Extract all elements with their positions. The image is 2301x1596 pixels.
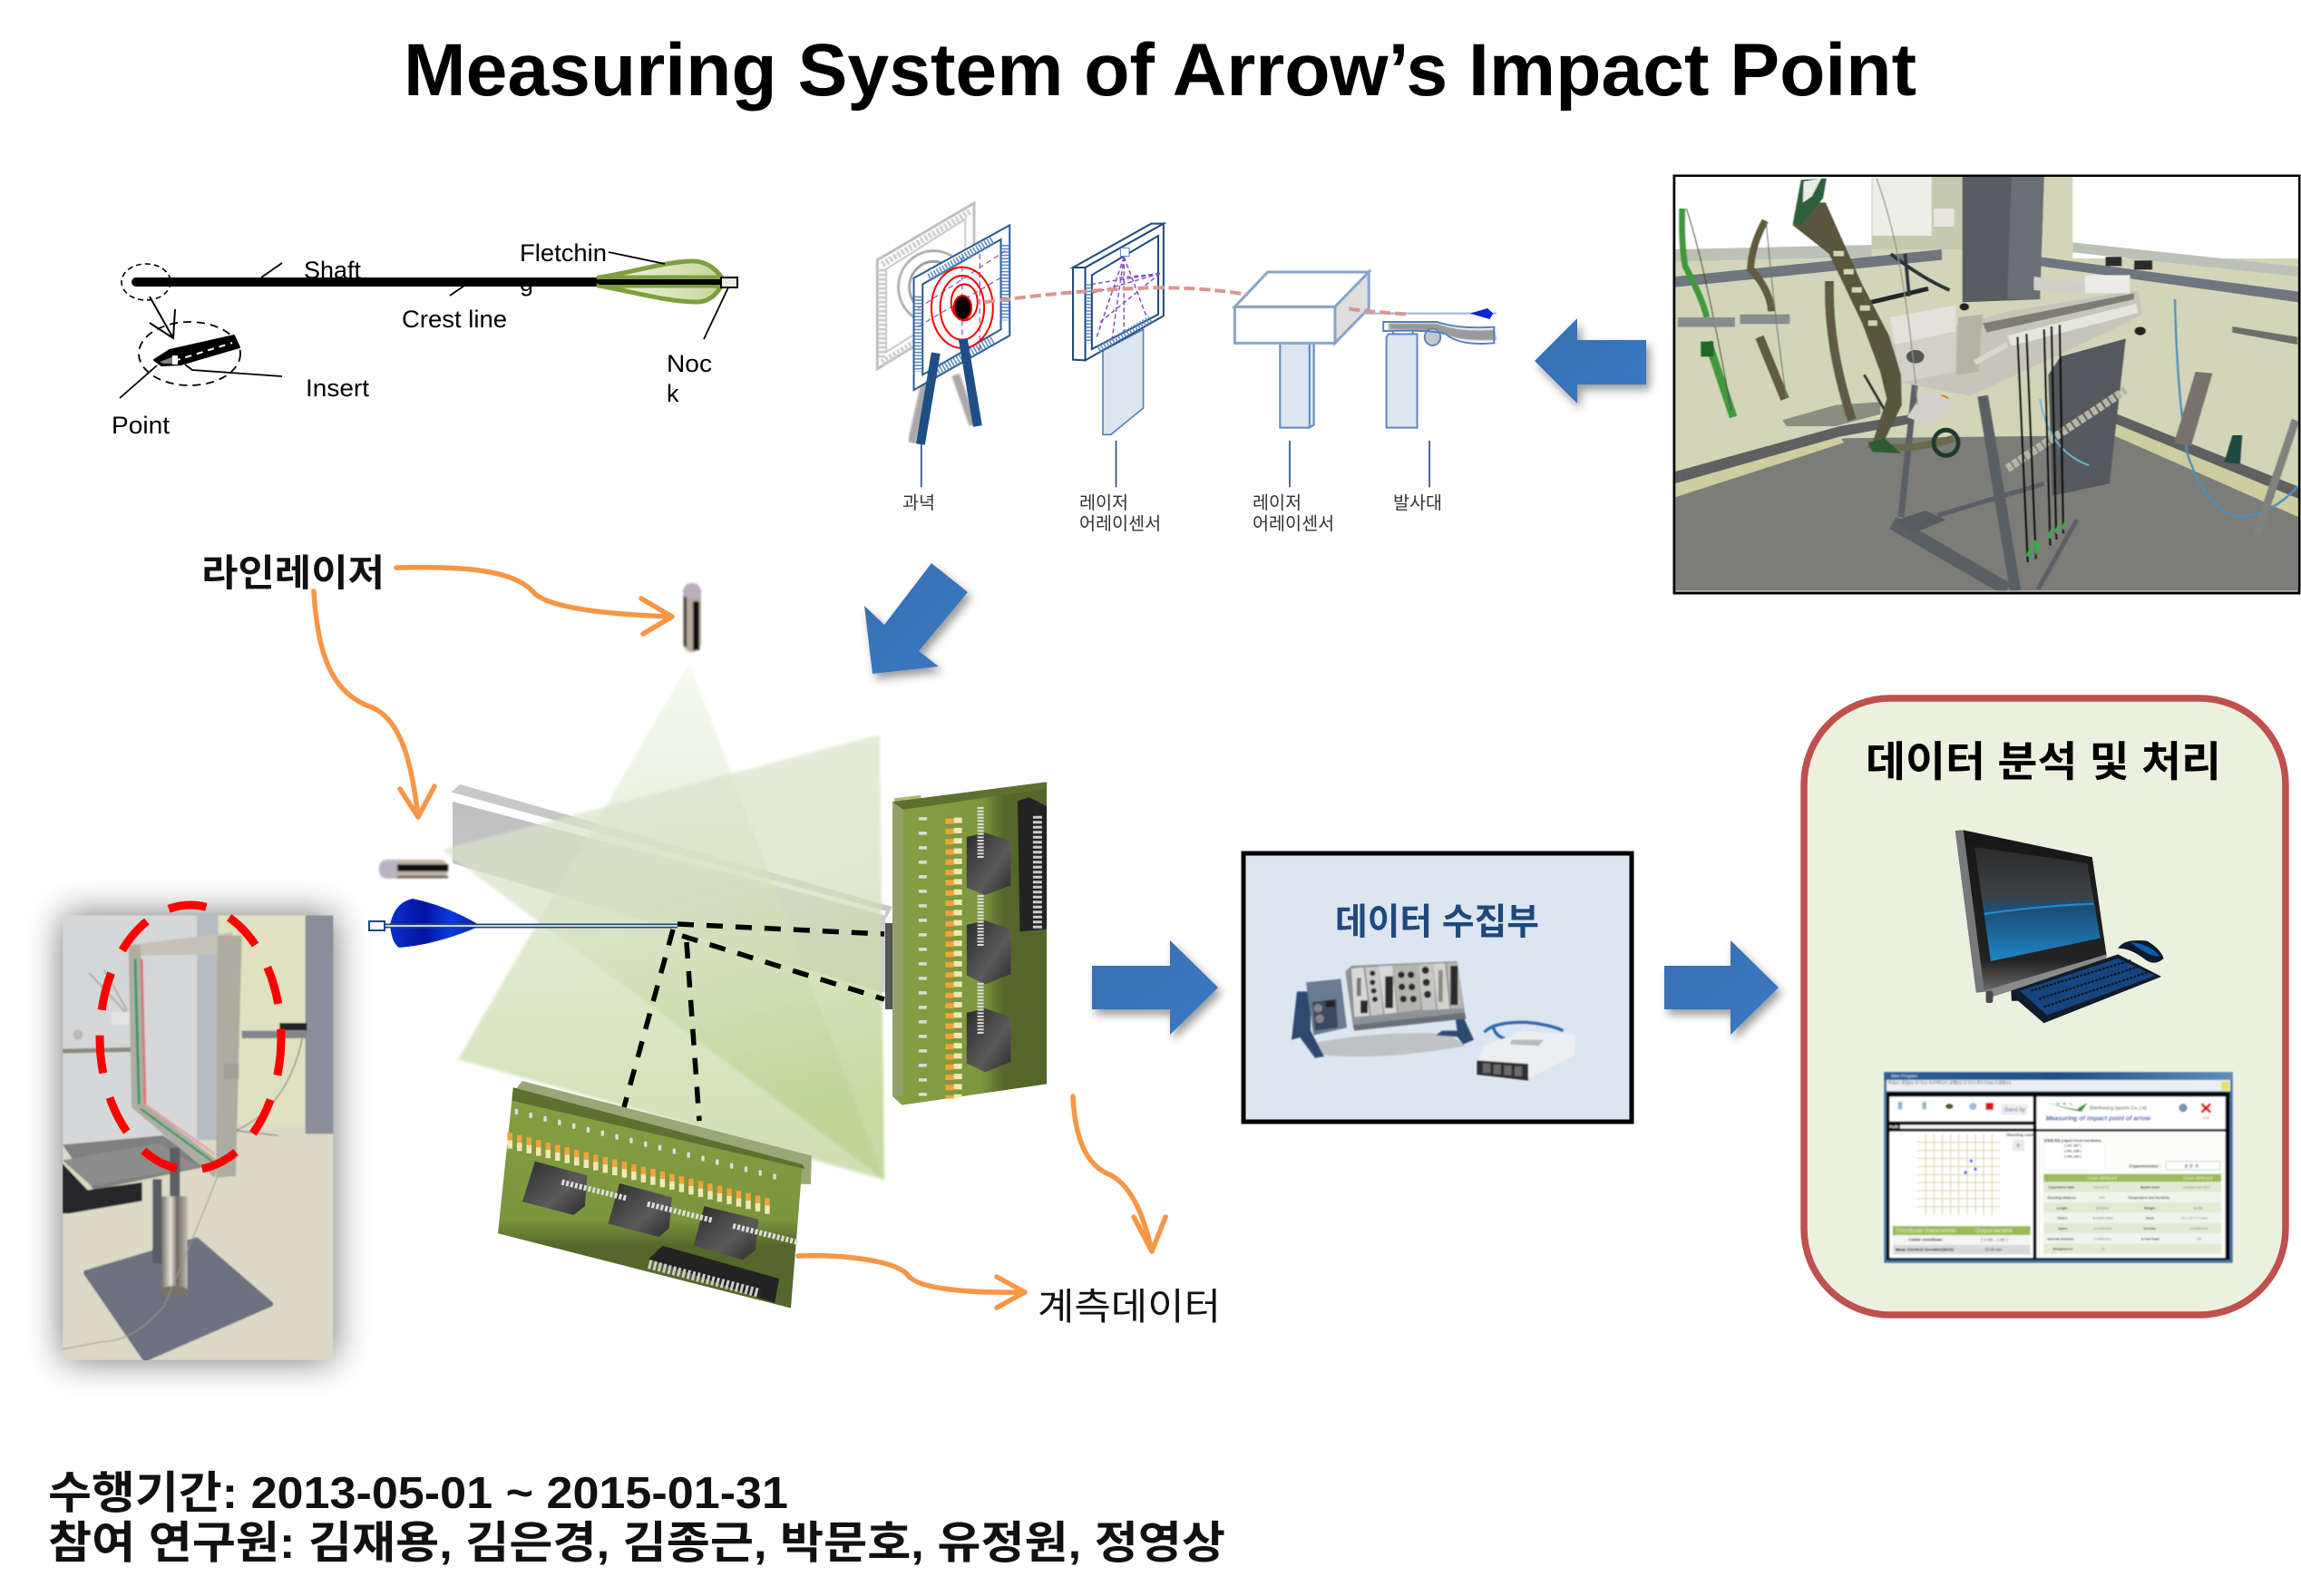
magnified point and insert: [154, 336, 239, 365]
label: laser array sensor 2: 레이저: [1253, 493, 1302, 513]
software screenshot: Shooting distance: [2047, 1196, 2076, 1200]
software screenshot: Experimentor :: [2130, 1163, 2161, 1169]
main rail: [1893, 290, 2142, 396]
software screenshot: HAKIMA RED 293.1: [2183, 1186, 2210, 1190]
software screenshot: Mean Absolute Deviation(MAD): [1896, 1248, 1955, 1252]
arrow anatomy diagram: [112, 239, 737, 439]
software screenshot: 15.45 mm: [1984, 1248, 2003, 1252]
software screenshot: Fletch: [2058, 1217, 2067, 1221]
software screenshot: 0.2450inches: [2093, 1237, 2111, 1241]
label: Insert: Insert: [306, 375, 370, 402]
label: Shaft: Shaft: [304, 257, 361, 284]
software screenshot: Arrow head: [2141, 1237, 2160, 1241]
software screenshot: 20: [2101, 1248, 2105, 1251]
hanging arrows: [2017, 325, 2063, 562]
software screenshot: ( 2.69 , 1.80 ): [1981, 1238, 2008, 1243]
panel: data analysis and processing: [1804, 698, 2286, 1315]
magnified tip dashed ellipse: [139, 322, 240, 385]
software screenshot: [1884, 1072, 2233, 1263]
LED bands: [918, 240, 1005, 376]
software screenshot: Main Program: [1891, 1074, 1917, 1078]
magnifier arrow: [150, 297, 175, 338]
machine frame legs: [1893, 381, 2077, 591]
panel heading: 데이터 수집부: [1335, 902, 1539, 942]
target rings: [931, 268, 993, 348]
software screenshot: Shooting count: [2006, 1133, 2035, 1137]
label: Fletching: [520, 239, 607, 297]
software screenshot: Internal diameter: [2047, 1237, 2074, 1241]
software screenshot: Weight: [2144, 1206, 2156, 1210]
result table: [1893, 1226, 2031, 1235]
software screenshot: Measuring of impact point of arrow: [2046, 1114, 2152, 1123]
ghost target panel: [877, 203, 974, 369]
lower sensor board: [498, 1081, 812, 1309]
photo scene: [1675, 177, 2298, 591]
fletching: [599, 261, 722, 302]
software screenshot: Path:: [1889, 1124, 1900, 1129]
software screenshot: 40M: [2099, 1196, 2105, 1200]
label: laser array sensor 2: [1253, 493, 1334, 534]
launcher: [1383, 322, 1497, 428]
small arrow on launcher: [1362, 308, 1497, 319]
orange arrow: lower board to measured data: [798, 1256, 1025, 1308]
bows on wall: [1678, 209, 1950, 420]
label: launcher: 발사대: [1393, 493, 1442, 513]
project period: 수행기간: 2013-05-01 ~ 2015-01-31: [48, 1469, 788, 1518]
software screenshot: Nock: [2146, 1217, 2155, 1221]
laser array 1 frame: [1073, 224, 1164, 360]
software screenshot: 송 문 게: [2184, 1163, 2199, 1169]
top line laser emitter: [683, 583, 701, 652]
software screenshot: Model name: [2140, 1186, 2160, 1190]
green laser sheet: top emitter: [458, 663, 884, 1180]
software screenshot: ( 146, 134 ): [2064, 1155, 2082, 1159]
specification table: [2043, 1174, 2221, 1182]
label: Nock: Noc: [667, 350, 712, 377]
label: laser array sensor 1: [1079, 493, 1161, 534]
label: laser array sensor 1: 레이저: [1079, 493, 1128, 513]
laser array 1 post: [1103, 329, 1144, 434]
panel box: [1804, 698, 2286, 1315]
software screenshot: SKL: [2056, 1102, 2076, 1107]
gray leg shadows: [912, 375, 973, 443]
orange arrow: side board to measured data: [1073, 1096, 1165, 1251]
software screenshot: Coordinate characteristic: [1896, 1229, 1956, 1234]
title: Measuring System of Arrow’s Impact Point: [404, 29, 1916, 112]
orange arrow: line laser to side emitter: [314, 591, 434, 817]
callout leaders: [921, 441, 1429, 487]
test setup schematic: [877, 203, 1497, 534]
software screenshot: Overlap: [2143, 1227, 2157, 1231]
label: Point: Point: [112, 412, 171, 439]
shaft tip dashed circle: [122, 264, 171, 300]
target frame: [914, 225, 1009, 390]
software screenshot: Output variable: [1975, 1229, 2013, 1234]
logo and product heading: [2046, 1103, 2088, 1112]
blue arrow: photo to schematic: [1535, 318, 1646, 404]
panel box: [1243, 853, 1632, 1122]
software screenshot: ( 141, 037 ): [2064, 1143, 2082, 1147]
software screenshot: 파일(F) 편집(E) 보기(V) 프로젝트(P) 실행(O) 도구(T) 윈도우(W) 도움말(H): [1888, 1080, 2012, 1086]
side line laser emitter: [379, 860, 448, 879]
software screenshot: YELLOW TCX Nock: [2180, 1217, 2208, 1221]
toolbar icons: [1898, 1102, 2027, 1114]
software screenshot: Length: [2056, 1206, 2068, 1210]
label: Fletching: g: [520, 269, 533, 297]
software screenshot: 2013.02.21: [2094, 1186, 2109, 1190]
gray beam rail: [451, 784, 892, 993]
label: laser array sensor 2: 어레이센서: [1253, 514, 1334, 534]
software screenshot: Temperature and Humidity: [2128, 1196, 2170, 1200]
label: Nock: [667, 350, 712, 407]
photo frame: [1674, 176, 2299, 593]
label: Nock: k: [667, 380, 679, 407]
software screenshot: Exit: [2203, 1115, 2210, 1120]
square sensor frame: [129, 932, 242, 1178]
red dashed highlight ellipse: [100, 905, 281, 1170]
toothed rack: [2007, 390, 2126, 469]
schematic drawing: [877, 203, 1497, 487]
big compound bow: [1793, 179, 1958, 455]
rail end bracket: [885, 923, 892, 1009]
green laser sheet: side emitter: [442, 735, 884, 1180]
coordinate list: 탄착점 좌표 (Impact Point coordinate): [2044, 1138, 2101, 1143]
label: laser array sensor 1: 어레이센서: [1079, 514, 1161, 534]
software screenshot: ( 161, 128 ): [2064, 1150, 2082, 1153]
target legs: [921, 339, 978, 444]
software screenshot: 30 inches: [2096, 1206, 2109, 1210]
label: target: 과녁: [902, 493, 935, 513]
toolbar icons: Stand by: [2004, 1107, 2025, 1113]
software screenshot: Spine: [2058, 1227, 2067, 1231]
scatter chart: [1916, 1134, 2000, 1215]
purple laser dashes: [918, 251, 1005, 363]
stand scene: [63, 915, 334, 1360]
software screenshot: 0.0048inches: [2190, 1227, 2208, 1231]
blue arrow: schematic to sensor: [864, 563, 968, 674]
right sensor board: [892, 782, 1047, 1105]
icon: desktop computer: [1955, 830, 2164, 1023]
photo: sensor stand: [63, 905, 334, 1360]
blue arrow: acquisition to analysis: [1664, 940, 1779, 1035]
label: Crest line: Crest line: [402, 306, 507, 333]
dashed flight path: [984, 287, 1410, 315]
dashed sight lines: [624, 924, 884, 1121]
icon: DAQ chassis and USB module: [1292, 961, 1575, 1081]
shaft line: [136, 277, 600, 287]
nock: [721, 277, 737, 287]
blue fletched arrow: [369, 899, 678, 948]
label: Fletching: Fletchin: [520, 239, 607, 267]
software screenshot: ShinKwang Isports Co.,Ltd.: [2089, 1105, 2148, 1111]
software screenshot: 0.4120inches: [2094, 1227, 2112, 1231]
software screenshot: User defined: [2088, 1176, 2117, 1182]
panel: data acquisition: [1243, 853, 1632, 1122]
laser array 2 box and post: [1234, 272, 1369, 428]
software screenshot: Straightness: [2052, 1248, 2072, 1251]
software screenshot: BLAZER VANE: [2092, 1217, 2114, 1221]
label: line laser: 라인레이저: [201, 552, 385, 594]
sensor boards: [498, 782, 1047, 1309]
software screenshot: Center coordinate: [1908, 1238, 1943, 1242]
photo shadow: [63, 915, 334, 1360]
project info text: [48, 1469, 1225, 1568]
label: measured data: 계측데이터: [1038, 1286, 1221, 1328]
software screenshot: 34.95g: [2194, 1206, 2203, 1210]
software screenshot: 0: [2017, 1143, 2020, 1149]
software screenshot: Experiment date: [2049, 1186, 2074, 1190]
leader lines: [120, 252, 728, 398]
laser sensing assembly: [369, 583, 1047, 1309]
blue arrow: sensors to acquisition: [1092, 940, 1218, 1035]
participating researchers: 참여 연구원: 김재용, 김은경, 김종근, 박문호, 유정원, 정영상: [48, 1519, 1225, 1568]
panel heading: 데이터 분석 및 처리: [1866, 738, 2221, 785]
photo: shooting machine: [1674, 176, 2299, 593]
orange arrow: line laser to top emitter: [396, 568, 672, 634]
software screenshot: SIP: [2197, 1237, 2202, 1241]
software screenshot: User defined: [2183, 1176, 2212, 1182]
